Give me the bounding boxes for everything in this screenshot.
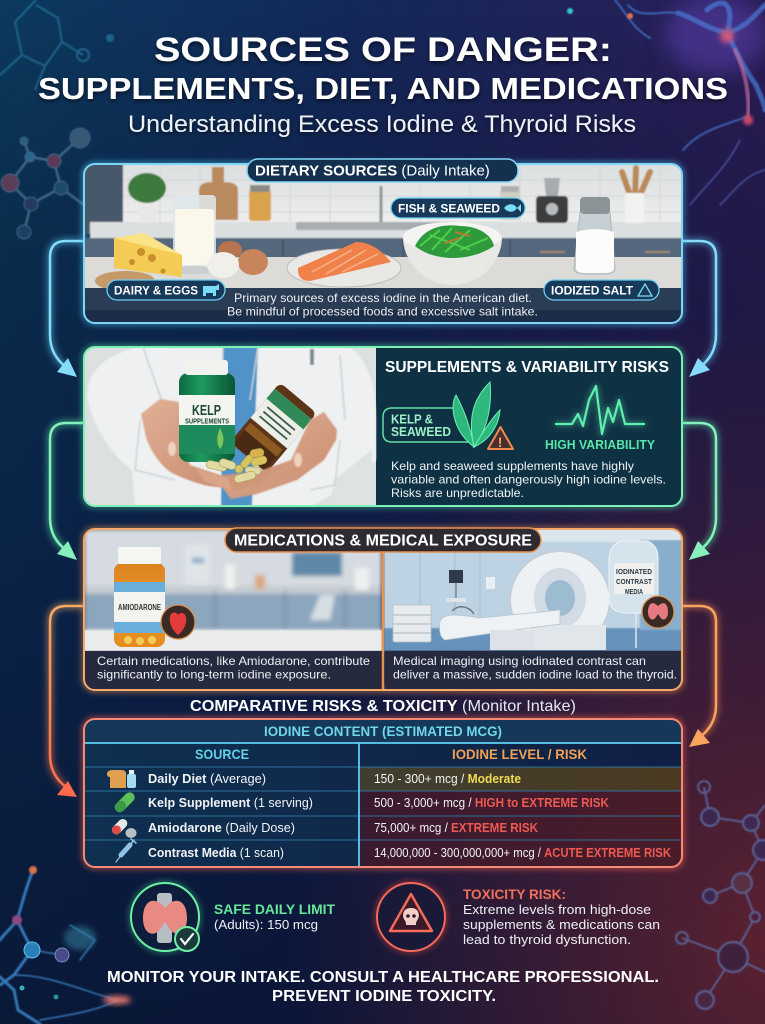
callout: toxicity risk: supplements & medications can: [463, 917, 660, 932]
icon: kelp leaves: [453, 382, 500, 447]
call to action: [107, 969, 659, 1005]
text: amiodarone description: significantly to long-term iodine exposure.: [97, 668, 331, 682]
text: imaging description: [393, 654, 677, 682]
photo: contrast iv bag: IODINATED: [616, 567, 653, 576]
photo: kelp bottle: [179, 360, 235, 462]
row: amiodarone: 75,000+ mcg / EXTREME RISK: [374, 821, 538, 835]
photo: ct scanner: [510, 551, 610, 650]
column header: source: SOURCE: [195, 746, 249, 762]
photo: cart: [393, 605, 431, 642]
row highlight: high: [360, 791, 682, 816]
title: [38, 31, 728, 138]
callout: toxicity risk: Extreme levels from high-dose: [463, 902, 651, 917]
arrow: orange left: [50, 606, 84, 797]
caption strip right: [385, 651, 682, 690]
callout: safe daily limit: (Adults): 150 mcg: [214, 917, 318, 932]
photo: eggs: [207, 241, 268, 278]
caption strip left: [84, 651, 382, 690]
photo: kitchen background: [84, 164, 682, 258]
text: dietary description: [227, 291, 538, 318]
photo: doctor coat: [87, 347, 376, 506]
icon: bread and bottle: [107, 770, 136, 788]
photo: plant: [127, 172, 167, 212]
photo: salt shaker: [574, 197, 615, 274]
photo: contrast iv bag: [609, 529, 658, 648]
photo: contrast iv bag: CONTRAST: [616, 577, 652, 586]
callout: toxicity risk: lead to thyroid dysfunction.: [463, 932, 631, 947]
row: amiodarone: Amiodarone (Daily Dose): [148, 821, 295, 835]
background: molecule top left: [0, 0, 113, 90]
table title: IODINE CONTENT (ESTIMATED MCG): [264, 723, 502, 739]
row: daily diet: [107, 770, 521, 788]
photo: utensils: [622, 168, 650, 223]
photo: ct table: [440, 607, 560, 650]
label: iodized salt: IODIZED SALT: [551, 284, 634, 298]
photo: blender: [536, 178, 568, 223]
heading pill: dietary sources: DIETARY SOURCES (Daily Intake): [255, 162, 490, 180]
icon: variability pulse: [556, 386, 644, 434]
text: imaging description: Medical imaging using iodinated contrast can: [393, 654, 646, 668]
photo: milk glass: [173, 195, 216, 274]
icon: thyroid badge: [642, 596, 674, 628]
icon: warning triangle: [488, 427, 513, 450]
arrow: green left: [50, 423, 84, 560]
photo: contrast iv bag: MEDIA: [625, 587, 643, 596]
text: imaging description: deliver a massive, sudden iodine load to the thyroid.: [393, 668, 677, 682]
label: high variability: HIGH VARIABILITY: [545, 437, 655, 452]
label: kelp and seaweed: [391, 412, 451, 439]
arrow: blue left: [50, 241, 84, 377]
heading: supplements: SUPPLEMENTS & VARIABILITY RISKS: [385, 359, 669, 376]
label: kelp and seaweed: KELP &: [391, 412, 433, 426]
heading pill: medications: MEDICATIONS & MEDICAL EXPOSURE: [234, 532, 532, 550]
row highlight: acute: [360, 840, 682, 867]
arrow: green right: [682, 423, 716, 560]
photo: plate with salmon: [287, 242, 401, 287]
photo: seaweed bowl: [403, 222, 502, 285]
row: amiodarone: [110, 817, 538, 838]
photo: amiodarone bottle: [114, 547, 165, 647]
row: contrast media: [116, 839, 671, 862]
heading pill: dietary sources: [247, 159, 518, 182]
row highlight: extreme: [360, 816, 682, 840]
arrow: orange right: [682, 606, 716, 747]
call to action: PREVENT IODINE TOXICITY.: [272, 988, 496, 1005]
row: kelp supplement: 500 - 3,000+ mcg / HIGH to EXTREME RISK: [374, 796, 609, 810]
photo: monitor stand: [446, 570, 495, 602]
photo: ct room background: [384, 529, 682, 651]
icon: kelp outline box: [383, 408, 470, 442]
text: supplement description: variable and often dangerously high iodine levels.: [391, 472, 666, 486]
text: dietary description: Be mindful of processed foods and excessive salt intake.: [227, 304, 538, 318]
photo: right hand: [195, 412, 337, 499]
photo: capsules: [205, 448, 268, 484]
row: contrast media: Contrast Media (1 scan): [148, 846, 284, 860]
photo: left hand: [141, 399, 229, 487]
photo: jar: [249, 185, 271, 221]
text: supplement description: [391, 459, 666, 500]
text: amiodarone description: [97, 654, 370, 682]
label: dairy and eggs: [107, 280, 225, 300]
label: fish and seaweed: FISH & SEAWEED: [398, 202, 500, 216]
photo: kelp bottle: SUPPLEMENTS: [185, 416, 229, 426]
text: amiodarone description: Certain medications, like Amiodarone, contribute: [97, 654, 370, 668]
label: kelp and seaweed: SEAWEED: [391, 425, 451, 439]
row: kelp supplement: Kelp Supplement (1 serving): [148, 796, 313, 810]
row: kelp supplement: [113, 790, 609, 814]
column header: iodine level: IODINE LEVEL / RISK: [452, 746, 587, 762]
title: Understanding Excess Iodine & Thyroid Risks: [128, 111, 636, 138]
background: nerve network lower left: [0, 866, 131, 1024]
label: iodized salt: [544, 280, 659, 300]
photo: front counter: [84, 257, 682, 288]
icon: syringe: [116, 839, 136, 862]
callout: safe daily limit: [214, 901, 335, 932]
panel: iodine content table: [84, 719, 682, 867]
row: daily diet: 150 - 300+ mcg / Moderate: [374, 772, 521, 786]
photo: cutting board: [199, 167, 238, 220]
row: contrast media: 14,000,000 - 300,000,000+ mcg / ACUTE EXTREME RISK: [374, 846, 671, 860]
photo: cheese: [114, 233, 182, 277]
text: supplement description: Kelp and seaweed supplements have highly: [391, 459, 634, 473]
arrow: blue right: [682, 241, 716, 377]
background: molecule left middle: [1, 128, 90, 239]
background: neuron top right: [567, 0, 765, 205]
row highlight: moderate: [360, 767, 682, 791]
heading: comparative risks: COMPARATIVE RISKS & TOXICITY (Monitor Intake): [190, 698, 576, 715]
label: fish and seaweed: [391, 198, 525, 218]
icon: green capsule: [113, 790, 137, 814]
panel: supplements: [84, 347, 682, 506]
icon: toxicity skull warning: [377, 883, 445, 951]
call to action: MONITOR YOUR INTAKE. CONSULT A HEALTHCARE PROFESSIONAL.: [107, 969, 659, 986]
photo: amiodarone bottle: AMIODARONE: [118, 603, 162, 612]
label: dairy and eggs: DAIRY & EGGS: [114, 284, 198, 298]
callout: toxicity risk: [463, 886, 660, 947]
panel: dietary sources: [84, 159, 682, 323]
caption strip: [85, 288, 681, 310]
row: daily diet: Daily Diet (Average): [148, 772, 266, 786]
title: SUPPLEMENTS, DIET, AND MEDICATIONS: [38, 71, 728, 106]
text: dietary description: Primary sources of excess iodine in the American diet.: [234, 291, 532, 305]
text: supplement description: Risks are unpredictable.: [391, 486, 524, 500]
background: molecules lower right: [676, 781, 765, 1009]
icon: heart badge: [161, 605, 195, 639]
title: SOURCES OF DANGER:: [154, 31, 612, 69]
icon: red pill and tablet: [110, 817, 136, 838]
photo: tipped bottle: [235, 384, 314, 470]
photo: kelp bottle: KELP: [192, 402, 221, 419]
icon: thyroid safe limit: [131, 883, 199, 951]
callout: toxicity risk: TOXICITY RISK:: [463, 886, 566, 902]
panel: medications: [84, 528, 682, 690]
heading pill: medications: [225, 528, 541, 552]
callout: safe daily limit: SAFE DAILY LIMIT: [214, 901, 335, 917]
icon: warning triangle: !: [498, 434, 502, 450]
photo: pharmacy background: [84, 529, 382, 651]
photo: small jar: [500, 186, 520, 220]
